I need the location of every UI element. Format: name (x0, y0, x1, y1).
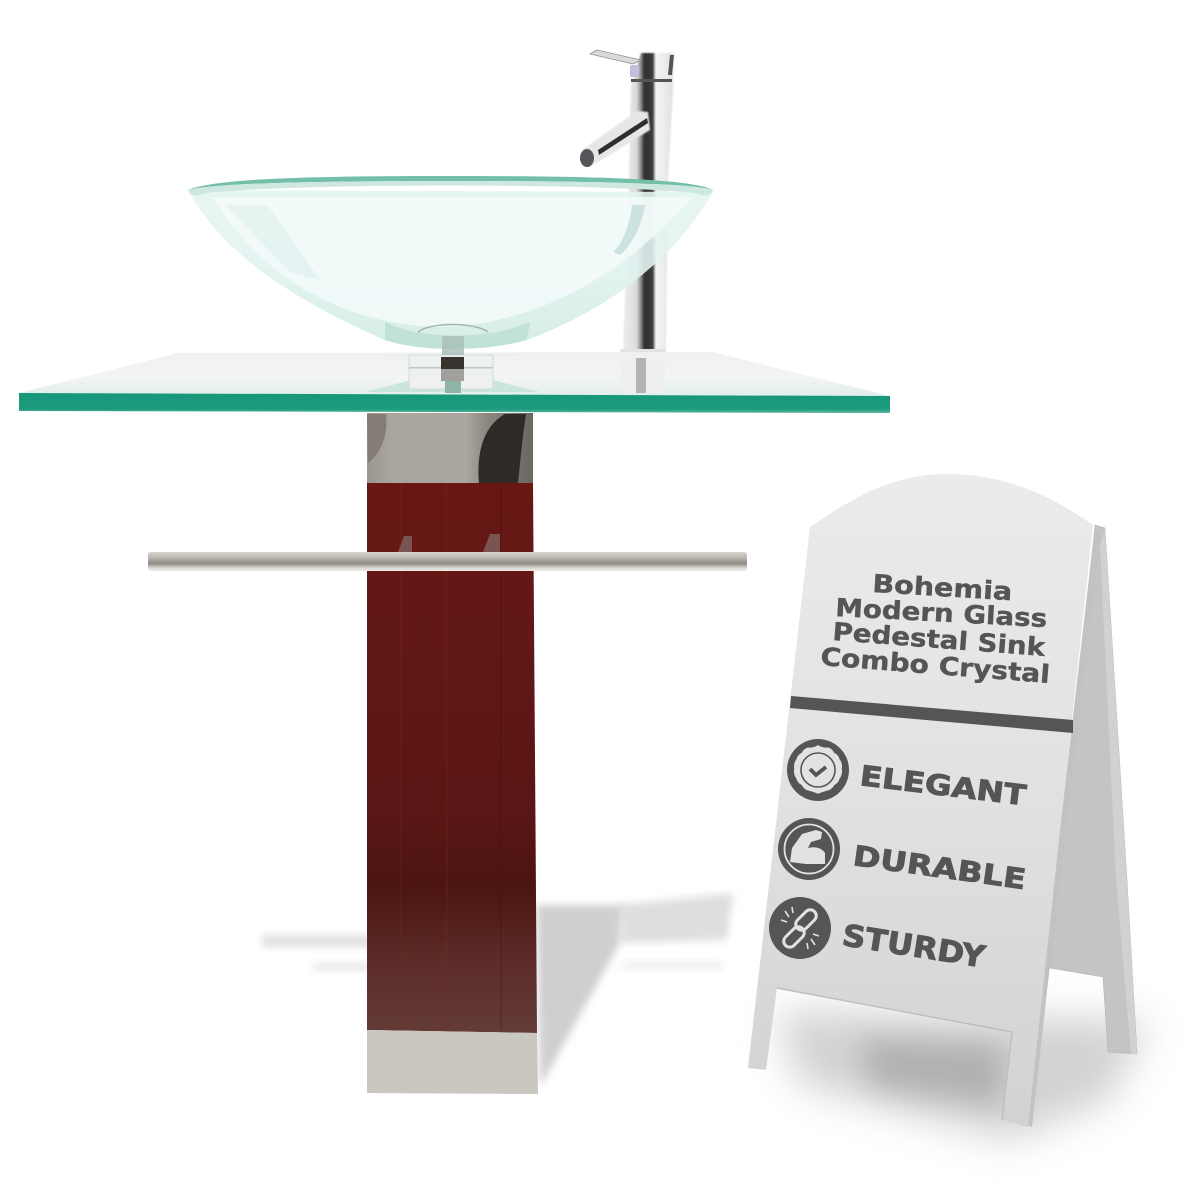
sign title: Modern Glass (835, 593, 1048, 633)
inner bowl glow (212, 197, 692, 327)
sign title: Combo Crystal (820, 642, 1051, 689)
faucet base flange (618, 349, 666, 357)
glass vessel bowl (188, 176, 713, 355)
right inner refraction (613, 205, 645, 255)
label: elegant: ELEGANT (858, 759, 1028, 812)
label: durable: DURABLE (851, 839, 1028, 896)
drain stem through bowl (442, 336, 464, 355)
spout dark reflection (598, 118, 648, 155)
faucet spout (582, 111, 650, 167)
drain dome (418, 324, 488, 332)
sign ground shadow (775, 1010, 1150, 1140)
faucet (580, 50, 674, 357)
faucet top right wedge (668, 55, 674, 75)
top surface (19, 352, 890, 396)
spout outlet (580, 149, 594, 167)
steel base (367, 1030, 538, 1094)
front panel side edge (1026, 525, 1100, 1127)
upper steel sleeve (367, 413, 533, 484)
icon: durable flexed arm (778, 818, 840, 880)
sign title: Bohemia (872, 569, 1013, 606)
rear panel (1050, 525, 1137, 1054)
towel bar brackets (398, 534, 500, 552)
glass countertop (19, 352, 890, 413)
left inner facet (225, 205, 320, 280)
bowl base thick glass (385, 322, 530, 349)
faucet reflection in glass (621, 358, 665, 393)
icon: elegant badge with check (787, 739, 849, 801)
faucet handle lever (590, 50, 641, 64)
faucet column (623, 53, 674, 350)
hot and cold indicator (630, 65, 639, 77)
bowl body (188, 190, 713, 349)
label: sturdy: STURDY (840, 918, 989, 976)
wood column (367, 483, 537, 1033)
drain pedestal mount (409, 355, 493, 393)
arch edge shading (777, 988, 1012, 1120)
rear panel edge (1100, 528, 1137, 1054)
faucet collar (631, 79, 672, 82)
bowl rim (188, 176, 713, 190)
front teal edge (19, 393, 890, 413)
rim lower edge (188, 181, 713, 195)
sign title: Pedestal Sink (832, 617, 1048, 662)
sign title (820, 569, 1051, 689)
drain reflection tint (365, 380, 540, 392)
pedestal (148, 413, 747, 1094)
divider bar (790, 696, 1073, 733)
towel bar (148, 552, 747, 571)
icon: sturdy chain link (769, 897, 831, 959)
A-frame sign (748, 474, 1137, 1127)
floor shadow of pedestal sink (262, 893, 733, 1087)
front panel (748, 474, 1093, 1127)
